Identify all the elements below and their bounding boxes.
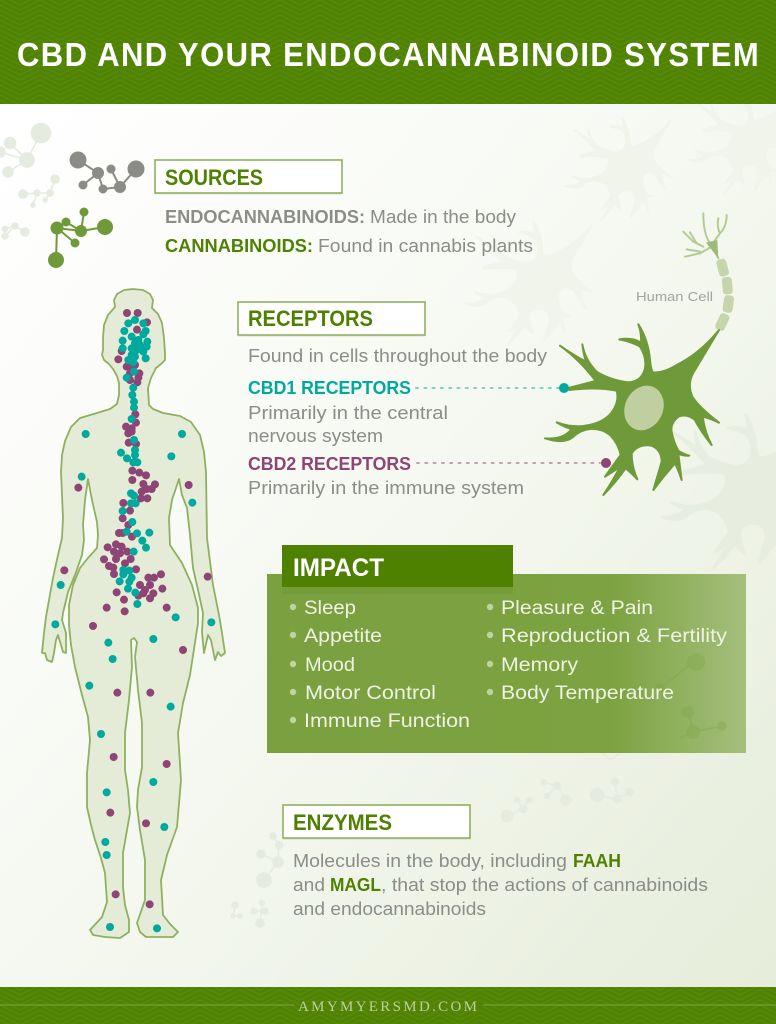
panel: sources	[155, 160, 533, 256]
decorative faded molecules	[0, 124, 634, 927]
heading: enzymes: ENZYMES	[293, 810, 392, 835]
text: enzymes description: FAAH	[573, 851, 621, 871]
text: cannabinoids: CANNABINOIDS:	[165, 236, 313, 256]
impact list left	[290, 598, 470, 732]
label: human cell: Human Cell	[636, 289, 713, 304]
decorative faded neurons	[466, 92, 776, 568]
impact list left: Sleep	[304, 598, 356, 619]
panel: receptors	[238, 302, 547, 498]
impact list left: Appetite	[304, 626, 382, 647]
human cell neuron	[416, 213, 734, 495]
title banner	[0, 0, 776, 104]
text: cbd2 description: Primarily in the immune system	[248, 478, 524, 498]
icon: green molecule	[49, 208, 112, 267]
heading: receptors: RECEPTORS	[248, 306, 373, 331]
cell body	[545, 324, 719, 495]
cbd1 connector	[416, 383, 569, 393]
panel: enzymes	[283, 805, 708, 919]
impact list left: Mood	[305, 655, 355, 676]
panel: impact	[267, 545, 746, 753]
text: cbd2 label: CBD2 RECEPTORS	[248, 454, 411, 474]
human body figure with receptor dots	[42, 289, 225, 938]
impact list right: Body Temperature	[501, 683, 674, 704]
nucleus	[617, 379, 671, 437]
icon: gray molecule	[70, 152, 144, 192]
text: endocannabinoids: ENDOCANNABINOIDS:	[165, 207, 365, 227]
heading: sources: SOURCES	[165, 165, 263, 190]
text: cannabinoids: Found in cannabis plants	[318, 236, 533, 256]
faded molecules inside the panel	[656, 654, 726, 738]
teal receptor dots	[51, 316, 215, 932]
text: endocannabinoids: Made in the body	[370, 207, 516, 227]
impact header	[282, 552, 513, 594]
text: cbd1 label: CBD1 RECEPTORS	[248, 378, 411, 398]
axon terminal branches	[683, 213, 727, 258]
axon segments	[714, 258, 734, 332]
impact list right: Reproduction & Fertility	[501, 626, 728, 647]
impact list right: Memory	[501, 655, 579, 676]
text: cbd1 description: nervous system	[248, 426, 383, 446]
impact list left: Motor Control	[305, 683, 436, 704]
text: enzymes description: and	[293, 875, 325, 895]
text: receptors intro: Found in cells throughout the body	[248, 346, 547, 366]
footer banner	[0, 987, 776, 1024]
text: enzymes description: Molecules in the body, including	[293, 851, 567, 871]
text: enzymes description: MAGL	[330, 875, 381, 895]
text: cbd1 description: Primarily in the central	[248, 403, 448, 423]
cbd2 connector	[417, 458, 611, 468]
body outline	[42, 289, 225, 938]
text: enzymes description: , that stop the actions of cannabinoids	[381, 875, 708, 895]
heading: impact: IMPACT	[293, 554, 384, 582]
purple receptor dots	[60, 309, 212, 908]
title: CBD AND YOUR ENDOCANNABINOID SYSTEM	[17, 36, 759, 73]
footer url: AMYMYERSMD.COM	[298, 999, 477, 1015]
impact list right	[487, 598, 728, 704]
impact list right: Pleasure & Pain	[501, 598, 653, 619]
text: enzymes description: and endocannabinoids	[293, 899, 486, 919]
impact list left: Immune Function	[304, 711, 470, 732]
